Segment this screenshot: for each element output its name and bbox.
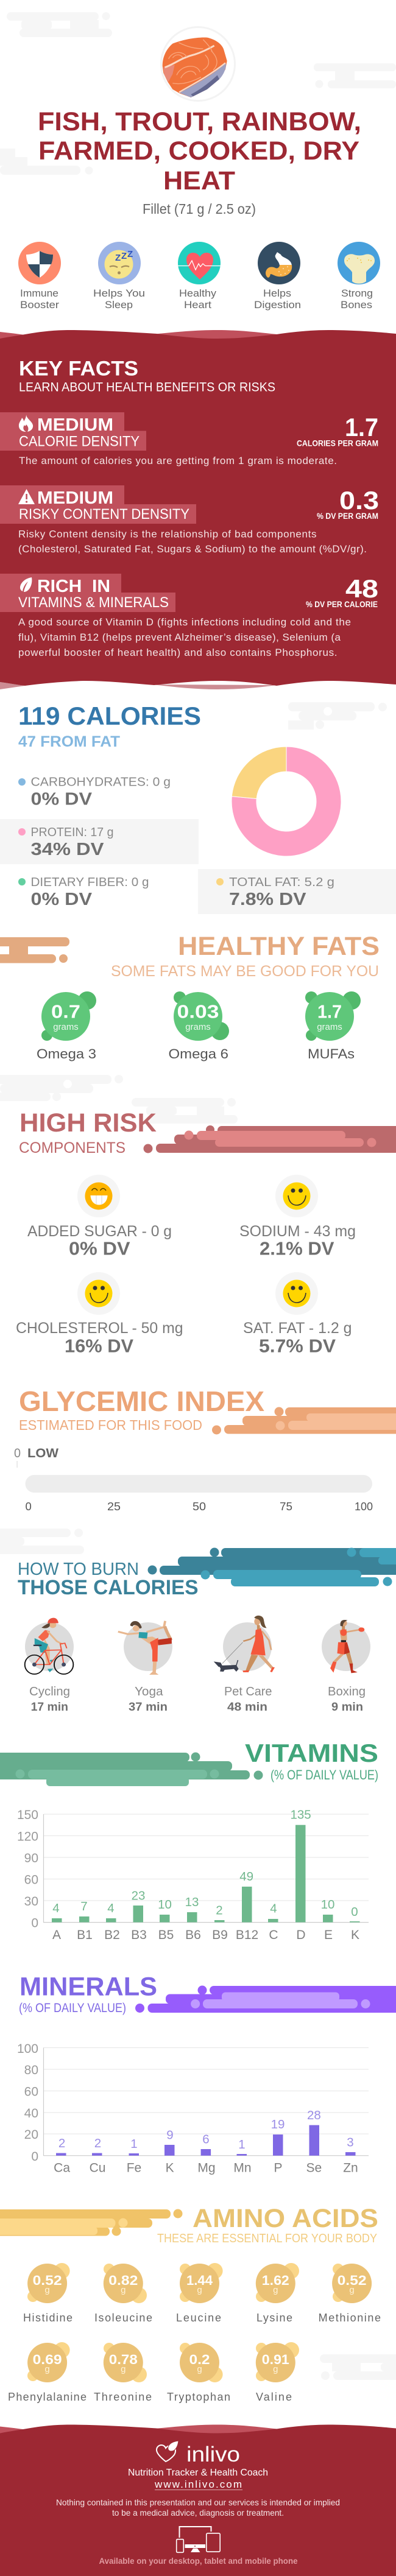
heading: KEY FACTS [19, 357, 138, 380]
panel: footer [0, 2425, 396, 2576]
fact: risky content density: RISKY CONTENT DENSITY [19, 506, 189, 523]
component: saturated fat: SAT. FAT - 1.2 g [243, 1320, 352, 1337]
bar chart: minerals: 6 [202, 2132, 210, 2146]
fact: rich in vitamins and minerals [0, 574, 378, 658]
legend: protein: PROTEIN: 17 g [30, 826, 113, 839]
logo: inlivo [157, 2441, 240, 2466]
activity: yoga [118, 1621, 172, 1714]
amino: lysine [256, 2263, 299, 2324]
bar chart: vitamins: B12 [236, 1928, 258, 1942]
amino: leucine: Leucine [176, 2312, 221, 2324]
fact: rich in vitamins and minerals: VITAMINS & MINERALS [18, 594, 169, 611]
bar chart: vitamins: E [324, 1928, 333, 1942]
amino: lysine: 1.62 [262, 2273, 289, 2288]
icon: sleeping face: Z [115, 253, 121, 263]
component: added sugar: ADDED SUGAR - 0 g [27, 1223, 172, 1240]
bar chart: vitamins: 10 [321, 1898, 334, 1912]
gauge track [26, 1475, 372, 1493]
icon: strong bones [338, 242, 380, 284]
heading: HOW TO BURN [18, 1560, 139, 1579]
legend: protein: 34% DV [30, 840, 104, 859]
bar chart: vitamins: 0 [351, 1905, 358, 1919]
panel: vitamins [0, 1739, 378, 1942]
icon: devices [177, 2527, 220, 2552]
panel: calories [0, 702, 396, 914]
donut chart [232, 747, 341, 856]
bar chart: vitamins: 30 [24, 1895, 38, 1909]
bar chart: vitamins: 135 [290, 1808, 311, 1822]
bar chart: minerals [17, 2042, 369, 2175]
bar chart: vitamins: C [269, 1928, 278, 1942]
amino: lysine: g [273, 2285, 278, 2295]
gauge scale: 0 [26, 1500, 32, 1513]
bar chart: minerals: 28 [307, 2108, 321, 2122]
heading [18, 1560, 199, 1599]
component: saturated fat: 5.7% DV [259, 1336, 336, 1357]
icon labels: Booster [20, 299, 59, 311]
bar chart: vitamins: B6 [185, 1928, 201, 1942]
bar chart: minerals: Mg [197, 2161, 216, 2175]
icon: immune booster shield [18, 242, 61, 284]
heading [157, 2204, 378, 2245]
title: FARMED, COOKED, DRY [38, 136, 359, 166]
heading: COMPONENTS [19, 1139, 126, 1156]
bar chart: minerals: 0 [31, 2150, 38, 2164]
bar chart: minerals: Zn [343, 2161, 358, 2175]
amino: threonine: 0.78 [109, 2352, 138, 2367]
heading: GLYCEMIC INDEX [19, 1385, 264, 1417]
panel: glycemic index [14, 1385, 396, 1513]
stat: omega 3: Omega 3 [37, 1046, 96, 1061]
bar chart: minerals: Se [306, 2161, 322, 2175]
bar chart: vitamins: B1 [77, 1928, 93, 1942]
disclaimer: to be a medical advice, diagnosis or treatment. [112, 2508, 284, 2518]
row highlights [0, 819, 396, 914]
component: cholesterol [16, 1272, 183, 1357]
fact: rich in vitamins and minerals: % DV PER CALORIE [306, 600, 378, 609]
stat: omega 6: grams [185, 1022, 211, 1032]
legend: carbohydrates [18, 776, 171, 809]
icon labels: Sleep [105, 299, 133, 311]
decorative bar [212, 1407, 396, 1435]
heading [111, 932, 380, 980]
amino: histidine: Histidine [23, 2312, 72, 2324]
amino: tryptophan: 0.2 [189, 2352, 210, 2367]
bar chart: minerals: 2 [58, 2136, 65, 2150]
activity: cycling: Cycling [29, 1685, 70, 1698]
bar chart: vitamins: D [296, 1928, 306, 1942]
icon labels [20, 287, 373, 311]
component: sodium: 2.1% DV [260, 1238, 334, 1259]
legend: dietary fiber [18, 876, 149, 909]
stat: MUFAs: MUFAs [308, 1046, 355, 1061]
legend: total fat: TOTAL FAT: 5.2 g [229, 876, 334, 889]
legend: total fat: 7.8% DV [229, 890, 306, 909]
decorative bar [135, 1985, 396, 2013]
bar chart: vitamins: 150 [17, 1808, 38, 1822]
heading [19, 357, 275, 395]
icon: flame [19, 415, 33, 432]
panel: high risk components [0, 1075, 396, 1357]
stat: MUFAs: 1.7 [317, 1001, 342, 1022]
heading: HIGH RISK [19, 1108, 157, 1138]
amino: valine: g [273, 2364, 278, 2374]
amino: leucine [176, 2263, 223, 2324]
icon labels: Healthy [179, 287, 217, 299]
activity: yoga: Yoga [135, 1685, 163, 1698]
title [38, 107, 361, 195]
amino: threonine: g [121, 2364, 126, 2374]
panel: how to burn those calories [0, 1529, 396, 1714]
fact: calorie density [0, 412, 378, 466]
activity: cycling: 17 min [31, 1700, 68, 1714]
bar chart: minerals: 20 [24, 2128, 38, 2142]
activity: pet care [214, 1616, 275, 1714]
bar chart: vitamins: B3 [131, 1928, 147, 1942]
component: added sugar [27, 1175, 172, 1259]
activity: cycling [25, 1618, 74, 1714]
heading: calories [18, 702, 201, 750]
bar chart: minerals: 2 [94, 2136, 101, 2150]
bar chart: vitamins: 7 [80, 1899, 88, 1913]
logo: inlivo: inlivo [186, 2443, 240, 2466]
panel: healthy fats [0, 932, 380, 1061]
heading: LEARN ABOUT HEALTH BENEFITS OR RISKS [19, 380, 275, 395]
bar chart: minerals: Cu [90, 2161, 105, 2175]
amino: methionine: g [349, 2285, 355, 2295]
icon: healthy heart [178, 242, 221, 284]
bar chart: vitamins: 49 [239, 1870, 253, 1884]
heading [19, 1108, 157, 1156]
bar chart: minerals: Mn [233, 2161, 252, 2175]
fact: risky content density: % DV PER GRAM [317, 512, 378, 521]
fact: calorie density: MEDIUM [37, 415, 113, 435]
decorative bar [0, 1753, 263, 1786]
bar chart: minerals: 1 [238, 2138, 246, 2152]
heading [19, 1385, 264, 1433]
amino: methionine: 0.52 [338, 2273, 367, 2288]
bar chart: vitamins: 90 [24, 1851, 38, 1865]
decorative bar [0, 2209, 183, 2236]
amino: threonine: Threonine [94, 2391, 152, 2403]
fact: calorie density: CALORIE DENSITY [19, 434, 140, 449]
bar chart: vitamins: 4 [107, 1901, 115, 1915]
gauge value: 0 [14, 1446, 21, 1460]
fact: risky content density: Risky Content density is the relationship of bad components [18, 529, 317, 540]
fact: risky content density [0, 485, 379, 555]
bar chart: vitamins: 4 [270, 1901, 277, 1916]
heading [19, 1972, 157, 2015]
gauge scale: 100 [355, 1500, 373, 1513]
bar chart: vitamins: A [52, 1928, 61, 1942]
icon labels: Strong [341, 287, 373, 299]
amino: lysine: Lysine [256, 2312, 292, 2324]
decorative bar [144, 1125, 396, 1153]
amino: phenylalanine [8, 2342, 87, 2403]
bar chart: vitamins: K [351, 1928, 359, 1942]
legend: dietary fiber: 0% DV [30, 890, 93, 909]
icon: leaf [20, 577, 32, 592]
fact: risky content density: (Cholesterol, Saturated Fat, Sugars & Sodium) to the amount (%DV/gr). [18, 543, 367, 555]
fact: rich in vitamins and minerals: RICH IN [37, 577, 110, 596]
amino: valine [256, 2342, 299, 2403]
gauge scale [26, 1500, 373, 1513]
legend: dietary fiber: DIETARY FIBER: 0 g [30, 876, 149, 889]
amino: phenylalanine: g [44, 2364, 50, 2374]
bar chart: vitamins: 23 [132, 1889, 145, 1902]
icon labels: Digestion [254, 299, 301, 311]
bar chart: minerals: 100 [17, 2042, 38, 2056]
legend: carbohydrates: CARBOHYDRATES: 0 g [30, 776, 171, 789]
gauge scale: 25 [107, 1500, 121, 1513]
icon: sleeping face [98, 242, 141, 284]
amino: threonine [94, 2343, 152, 2403]
fact: calorie density: 1.7 [345, 413, 378, 442]
icon labels: Helps You [93, 287, 145, 299]
amino: valine: Valine [256, 2391, 292, 2403]
amino: histidine: g [44, 2285, 50, 2295]
heading: ESTIMATED FOR THIS FOOD [19, 1417, 202, 1433]
stat: MUFAs: grams [317, 1022, 342, 1032]
amino: tryptophan: Tryptophan [167, 2391, 230, 2403]
activity: boxing: Boxing [328, 1685, 366, 1698]
title: FISH, TROUT, RAINBOW, [38, 107, 361, 136]
benefit icons row [18, 242, 380, 311]
panel: minerals [17, 1972, 396, 2175]
disclaimer [56, 2497, 340, 2518]
icon: sleeping face: Z [121, 251, 127, 261]
stat: omega 3 [37, 991, 96, 1061]
bar chart: minerals: 60 [24, 2085, 38, 2099]
amino: tryptophan [167, 2343, 230, 2403]
icon: warning triangle [18, 489, 35, 504]
stat: MUFAs [305, 991, 361, 1061]
stat: omega 6: Omega 6 [168, 1046, 228, 1061]
component: sodium [239, 1175, 356, 1259]
activity: pet care: Pet Care [224, 1685, 272, 1698]
amino: histidine [23, 2263, 72, 2324]
amino: valine: 0.91 [262, 2352, 289, 2367]
bar chart: vitamins: B2 [104, 1928, 120, 1942]
heading: HEALTHY FATS [178, 932, 380, 961]
bar chart: vitamins: 120 [17, 1829, 38, 1844]
fact: calorie density: CALORIES PER GRAM [297, 438, 378, 448]
bar chart: vitamins: 10 [158, 1898, 172, 1912]
amino: isoleucine: 0.82 [108, 2273, 138, 2288]
heading: VITAMINS [245, 1739, 378, 1767]
gauge scale: 75 [280, 1500, 292, 1513]
bar chart: minerals: Ca [54, 2161, 70, 2175]
amino: isoleucine: g [121, 2285, 126, 2295]
heading: SOME FATS MAY BE GOOD FOR YOU [111, 963, 379, 980]
fact: rich in vitamins and minerals: powerful booster of heart health) and also contains Phosphorus. [18, 647, 338, 658]
bar chart: vitamins: 0 [31, 1916, 38, 1930]
activity: boxing: 9 min [331, 1700, 363, 1714]
component: saturated fat [243, 1272, 352, 1357]
heading: calories: 47 FROM FAT [18, 733, 120, 750]
amino: phenylalanine: Phenylalanine [8, 2391, 87, 2403]
amino: isoleucine [94, 2264, 152, 2324]
stat: omega 3: grams [53, 1022, 79, 1032]
fact: rich in vitamins and minerals: 48 [345, 574, 378, 603]
gauge value: LOW [27, 1446, 58, 1460]
tagline: Nutrition Tracker & Health Coach [128, 2468, 268, 2478]
activity: pet care: 48 min [227, 1700, 267, 1714]
stat: omega 3: 0.7 [51, 1001, 80, 1022]
icon labels: Heart [184, 299, 211, 311]
amino: methionine: Methionine [319, 2312, 381, 2324]
icon: digestion stomach [258, 242, 300, 284]
gauge value [14, 1446, 58, 1468]
disclaimer: Nothing contained in this presentation and our services is intended or implied [56, 2497, 340, 2507]
amino: histidine: 0.52 [33, 2273, 62, 2288]
activity: yoga: 37 min [129, 1700, 168, 1714]
component: cholesterol: CHOLESTEROL - 50 mg [16, 1320, 183, 1337]
bar chart: minerals: 19 [271, 2117, 285, 2131]
bar chart: minerals: Fe [127, 2161, 141, 2175]
bar chart: vitamins: 4 [52, 1901, 60, 1915]
amino: leucine: g [197, 2285, 202, 2295]
decorative bar [147, 1548, 396, 1586]
heading: calories: 119 CALORIES [18, 702, 201, 730]
activity: boxing [322, 1620, 370, 1714]
gauge scale: 50 [193, 1500, 206, 1513]
title: HEAT [163, 166, 235, 195]
heading: AMINO ACIDS [193, 2204, 378, 2233]
panel: amino acids [0, 2204, 396, 2403]
amino: isoleucine: Isoleucine [94, 2312, 152, 2324]
bar chart: vitamins: 60 [24, 1873, 38, 1887]
stat: omega 6: 0.03 [177, 1001, 219, 1022]
icon labels: Helps [263, 287, 291, 299]
heading: MINERALS [19, 1972, 157, 2001]
food photo: salmon fillet [161, 27, 235, 101]
fact: rich in vitamins and minerals: flu), Vitamin B12 (helps prevent Alzheimer’s disease), Selenium (a [18, 632, 341, 643]
availability note: Available on your desktop, tablet and mobile phone [99, 2556, 298, 2566]
website: www.inlivo.com [154, 2479, 242, 2490]
bar chart: vitamins: 13 [185, 1895, 199, 1909]
icon labels: Immune [20, 287, 58, 299]
legend: protein [18, 826, 113, 859]
bar chart: vitamins: 2 [216, 1904, 223, 1918]
amino: leucine: 1.44 [186, 2273, 213, 2288]
heading: THESE ARE ESSENTIAL FOR YOUR BODY [157, 2232, 377, 2245]
header section [0, 12, 396, 311]
fact: risky content density: MEDIUM [37, 488, 113, 508]
bar chart: minerals: 1 [130, 2137, 138, 2151]
component: added sugar: 0% DV [69, 1238, 130, 1259]
fact: risky content density: 0.3 [339, 486, 379, 515]
serving size: Fillet (71 g / 2.5 oz) [143, 201, 256, 217]
bar chart: minerals: K [166, 2161, 174, 2175]
decorative bar [0, 937, 69, 963]
amino: phenylalanine: 0.69 [33, 2352, 62, 2367]
amino: methionine [319, 2264, 381, 2324]
fact: calorie density: The amount of calories you are getting from 1 gram is moderate. [19, 455, 337, 466]
icon: sleeping face: Z [127, 249, 133, 259]
bar chart: vitamins: B9 [212, 1928, 228, 1942]
panel: key facts [0, 330, 396, 689]
bar chart: minerals: 9 [166, 2128, 174, 2142]
icon labels: Bones [341, 299, 372, 311]
amino: tryptophan: g [197, 2364, 202, 2374]
bar chart: minerals: 3 [347, 2135, 354, 2149]
bar chart: minerals: P [274, 2161, 283, 2175]
heading [245, 1739, 378, 1782]
stat: omega 6 [168, 991, 229, 1061]
heading: (% OF DAILY VALUE) [19, 2001, 126, 2015]
bar chart: minerals: 40 [24, 2106, 38, 2120]
fact: rich in vitamins and minerals: A good source of Vitamin D (fights infections including cold and the [18, 616, 351, 628]
heading: THOSE CALORIES [18, 1576, 199, 1599]
bar chart: vitamins [17, 1808, 369, 1942]
bar chart: minerals: 80 [24, 2063, 38, 2077]
component: cholesterol: 16% DV [65, 1336, 133, 1357]
legend: total fat [216, 876, 334, 909]
bar chart: vitamins: B5 [158, 1928, 174, 1942]
component: sodium: SODIUM - 43 mg [239, 1223, 356, 1240]
legend: carbohydrates: 0% DV [30, 790, 93, 809]
